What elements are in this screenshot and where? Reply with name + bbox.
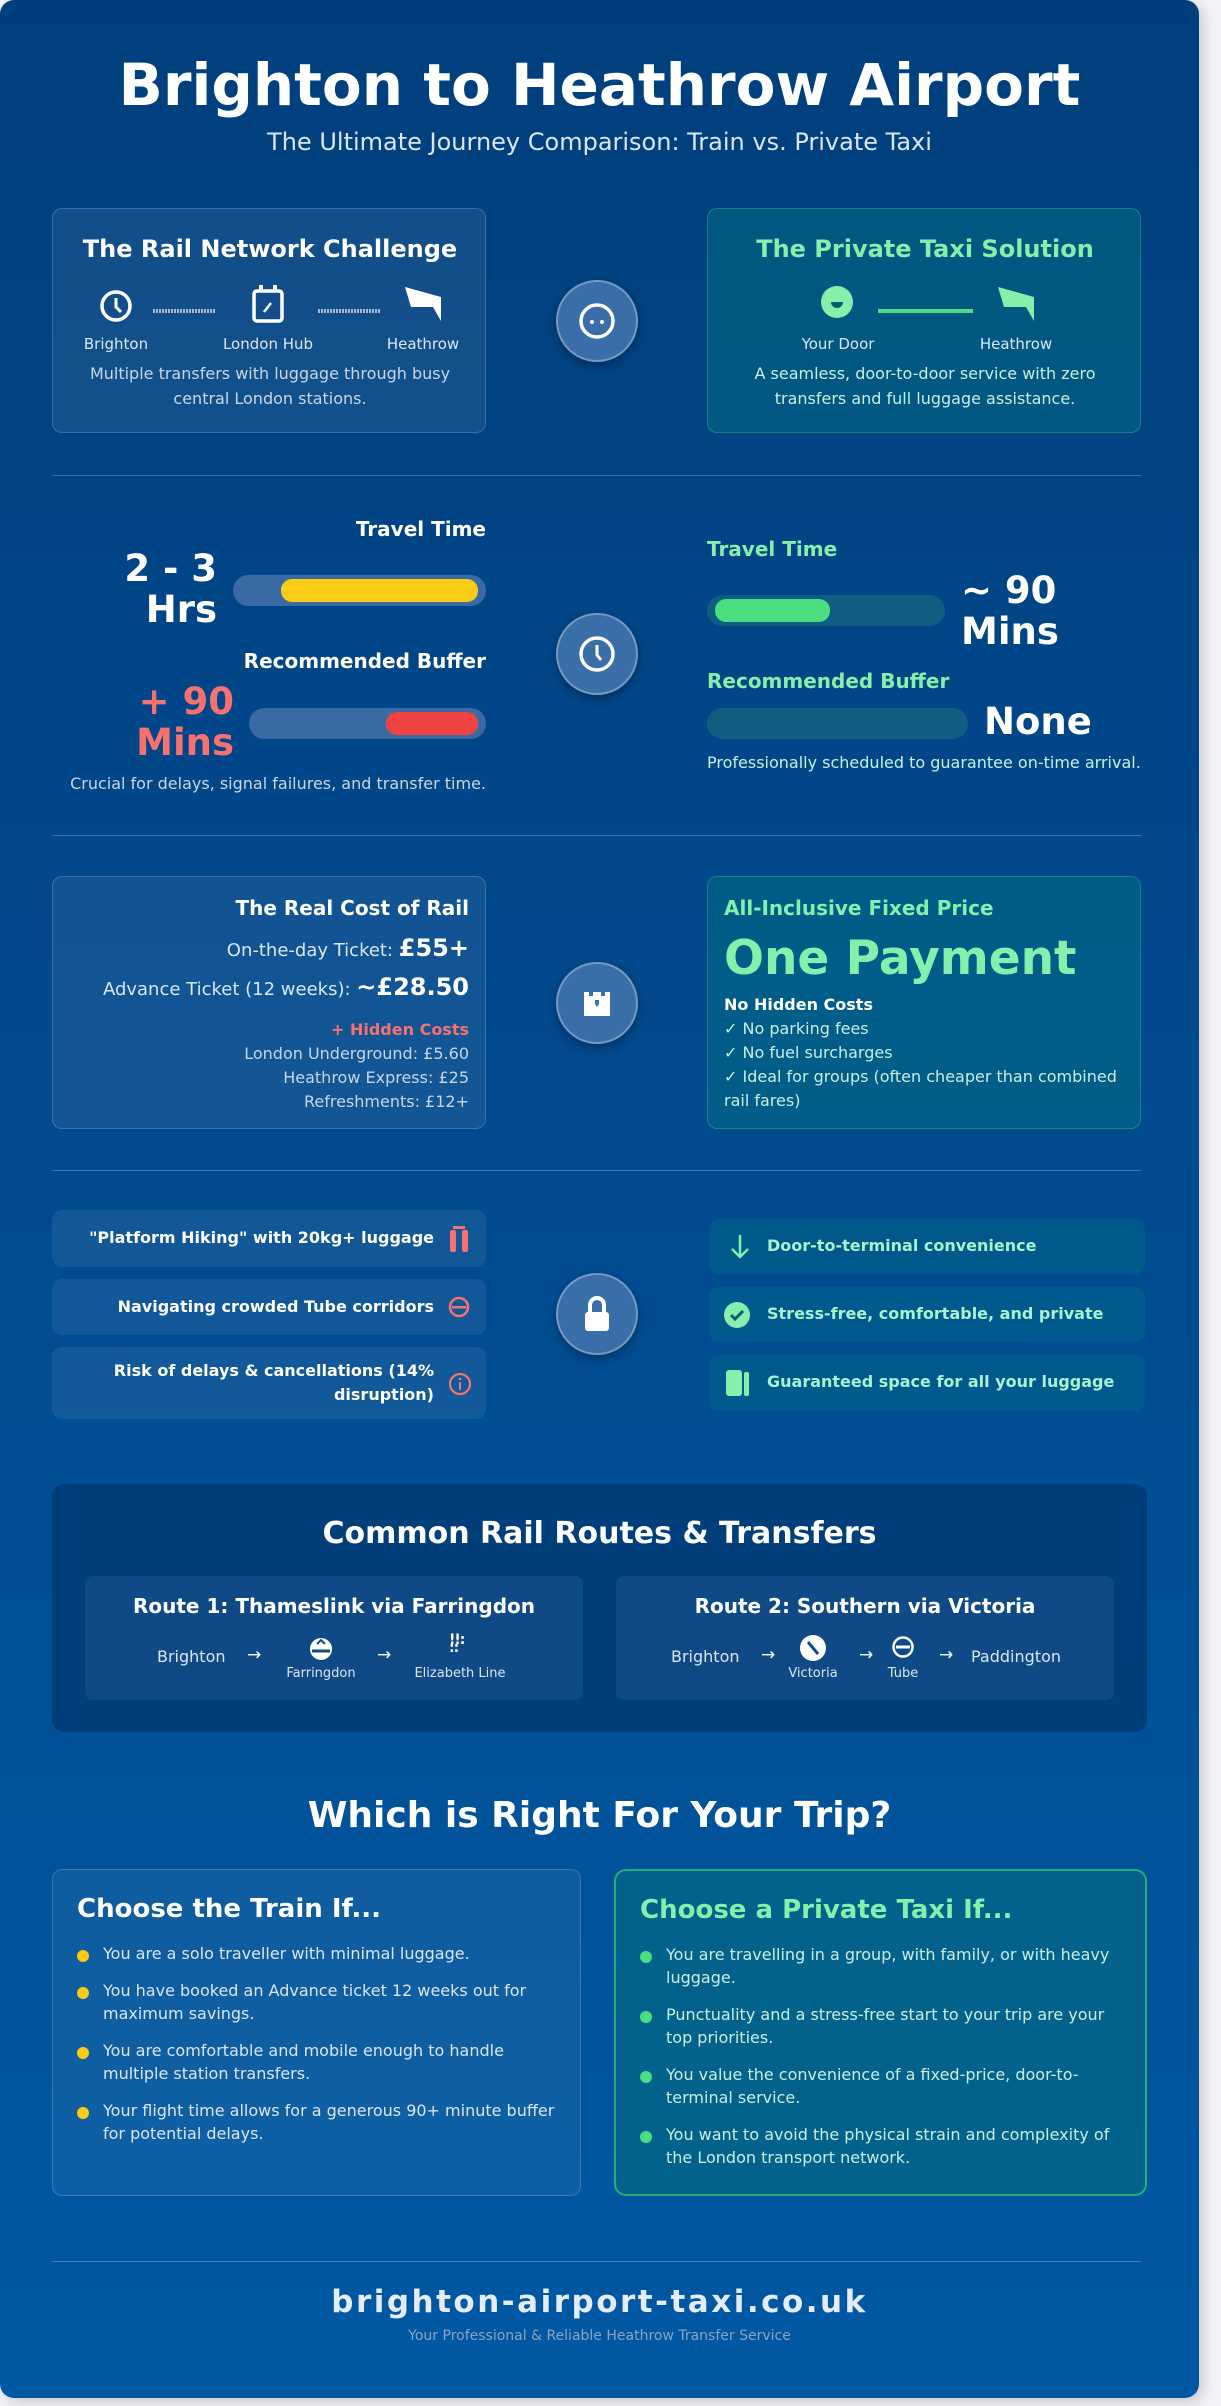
item: door to terminal (709, 1219, 1145, 1274)
list: Punctuality and a stress-free start to your trip are your top priorities. (666, 2005, 1104, 2047)
value: Mins (961, 610, 1059, 653)
route 2: → (859, 1645, 873, 1665)
route diagram (84, 285, 459, 353)
panel: real cost of rail: The Real Cost of Rail (235, 896, 469, 920)
route 2 (616, 1576, 1114, 1700)
item: door to terminal: Door-to-terminal convenience (767, 1236, 1036, 1255)
list: ✓ No fuel surcharges (724, 1043, 893, 1062)
heading: which is right: Which is Right For Your Trip? (308, 1795, 891, 1836)
panel: choose taxi (614, 1869, 1147, 2196)
item: delays: Risk of delays & cancellations (14% disruption) (114, 1361, 434, 1404)
item: platform hiking (52, 1210, 486, 1267)
route 1 (85, 1576, 583, 1700)
icon: clock circle (556, 613, 638, 695)
title: Brighton to Heathrow Airport (119, 51, 1080, 119)
note: Crucial for delays, signal failures, and transfer time. (70, 774, 486, 793)
heading: The Rail Network Challenge (83, 235, 457, 263)
rail pain points (52, 1210, 486, 1419)
list: ✓ Ideal for groups (often cheaper than combined rail fares) (724, 1067, 1117, 1110)
route diagram: Heathrow (980, 335, 1052, 353)
value none: None (984, 700, 1092, 743)
item: delays (52, 1347, 486, 1419)
icon: door pin (821, 286, 853, 318)
description: A seamless, door-to-door service with zero transfers and full luggage assistance. (754, 364, 1096, 408)
bar: buffer (249, 708, 486, 739)
icon: heathrow plane (405, 287, 441, 321)
heading: Common Rail Routes & Transfers (322, 1516, 877, 1551)
panel: rail time (70, 517, 486, 793)
route 2: Tube (888, 1666, 918, 1681)
route diagram: Brighton (84, 335, 148, 353)
panel: real cost of rail: Advance Ticket (12 weeks): ~£28.50 (103, 973, 469, 1001)
item: luggage (709, 1355, 1145, 1411)
label: travel time: Travel Time (356, 517, 486, 541)
hidden costs (244, 1020, 469, 1111)
item: platform hiking: "Platform Hiking" with 20kg+ luggage (89, 1228, 434, 1247)
value: 2-3 hrs (124, 547, 217, 631)
note: Professionally scheduled to guarantee on-time arrival. (707, 753, 1141, 772)
list (77, 1944, 554, 2143)
hidden costs: London Underground: £5.60 (244, 1044, 469, 1063)
item: tube corridors: Navigating crowded Tube corridors (118, 1297, 434, 1316)
item: stress free: Stress-free, comfortable, and private (767, 1304, 1103, 1323)
icon: elizabeth line (449, 1632, 464, 1656)
label: Travel Time (707, 537, 837, 561)
panel: choose taxi: Choose a Private Taxi If... (640, 1895, 1012, 1925)
list: You are comfortable and mobile enough to handle multiple station transfers. (103, 2041, 504, 2083)
panel: common rail routes (52, 1484, 1147, 1732)
value: ~ 90 (961, 569, 1056, 612)
icon: castle (556, 962, 638, 1044)
icon: farringdon (310, 1638, 332, 1660)
route 2: Route 2: Southern via Victoria (695, 1594, 1035, 1618)
item: tube corridors (52, 1279, 486, 1335)
item: stress free (709, 1287, 1145, 1342)
panel: private taxi solution (707, 208, 1141, 433)
route 1: Farringdon (286, 1666, 356, 1681)
panel: taxi time (707, 537, 1141, 772)
list: You are travelling in a group, with family, or with heavy luggage. (666, 1945, 1109, 1987)
heading: The Private Taxi Solution (756, 235, 1094, 263)
value: 2-3 hrs: Hrs (146, 588, 217, 631)
list: You want to avoid the physical strain and complexity of the London transport network. (666, 2125, 1109, 2167)
route 2: → (939, 1645, 953, 1665)
bar (707, 595, 945, 626)
hidden costs: + Hidden Costs (331, 1020, 469, 1039)
route 2: Victoria (788, 1666, 838, 1681)
list (640, 1945, 1110, 2167)
value: +90 mins (136, 680, 234, 764)
bar: travel (233, 575, 486, 606)
route 2: Brighton (671, 1647, 740, 1666)
list: No Hidden Costs (724, 995, 873, 1014)
taxi benefits (709, 1219, 1145, 1411)
value (961, 569, 1059, 653)
icon: elizabeth line: !!: (449, 1632, 464, 1648)
route 1: Brighton (157, 1647, 226, 1666)
list: Your flight time allows for a generous 90+ minute buffer for potential delays. (103, 2101, 554, 2143)
label buffer: Recommended Buffer (707, 669, 949, 693)
description: Multiple transfers with luggage through busy central London stations. (90, 364, 450, 408)
route 2: Paddington (971, 1647, 1061, 1666)
list: You have booked an Advance ticket 12 weeks out for maximum savings. (103, 1981, 526, 2023)
value: 2-3 hrs: 2 - 3 (124, 547, 217, 590)
hidden costs: Heathrow Express: £25 (283, 1068, 469, 1087)
list: You are a solo traveller with minimal luggage. (103, 1944, 470, 1963)
value: +90 mins: Mins (136, 721, 234, 764)
panel: fixed price: All-Inclusive Fixed Price (724, 896, 994, 920)
icon: clock (100, 290, 132, 322)
panel: rail network challenge (52, 208, 486, 433)
route 1: → (247, 1645, 261, 1665)
value: +90 mins: + 90 (139, 680, 234, 723)
panel: choose the train: Choose the Train If... (77, 1894, 381, 1924)
panel: fixed price (707, 876, 1141, 1129)
list (724, 995, 1117, 1110)
icon: victoria (800, 1635, 826, 1661)
list: You value the convenience of a fixed-price, door-to-terminal service. (666, 2065, 1079, 2107)
footer: domain: brighton-airport-taxi.co.uk (331, 2284, 868, 2320)
route diagram (802, 286, 1052, 353)
icon: heathrow (998, 287, 1034, 321)
item: luggage: Guaranteed space for all your luggage (767, 1372, 1114, 1391)
route 1: → (377, 1645, 391, 1665)
panel: choose the train (52, 1869, 581, 2196)
subtitle: The Ultimate Journey Comparison: Train vs. Private Taxi (267, 128, 932, 156)
footer: tagline: Your Professional & Reliable Heathrow Transfer Service (408, 2328, 791, 2344)
route diagram: Your Door (802, 335, 874, 353)
route 1: Elizabeth Line (414, 1666, 506, 1681)
icon: center plug (556, 280, 638, 362)
route diagram: Heathrow (387, 335, 459, 353)
big value: One Payment (724, 931, 1077, 986)
icon: calendar (252, 285, 284, 323)
route diagram: London Hub (223, 335, 313, 353)
icon: elizabeth line: :: (449, 1640, 458, 1656)
bar (707, 708, 968, 739)
list: ✓ No parking fees (724, 1019, 869, 1038)
icon: tube (892, 1636, 914, 1658)
panel: real cost of rail (52, 876, 486, 1129)
route 2: → (761, 1645, 775, 1665)
route 1: Route 1: Thameslink via Farringdon (133, 1594, 535, 1618)
hidden costs: Refreshments: £12+ (304, 1092, 469, 1111)
icon: lock (556, 1273, 638, 1355)
label: buffer: Recommended Buffer (244, 649, 486, 673)
ticket prices: On-the-day Ticket: £55+ (227, 934, 469, 962)
